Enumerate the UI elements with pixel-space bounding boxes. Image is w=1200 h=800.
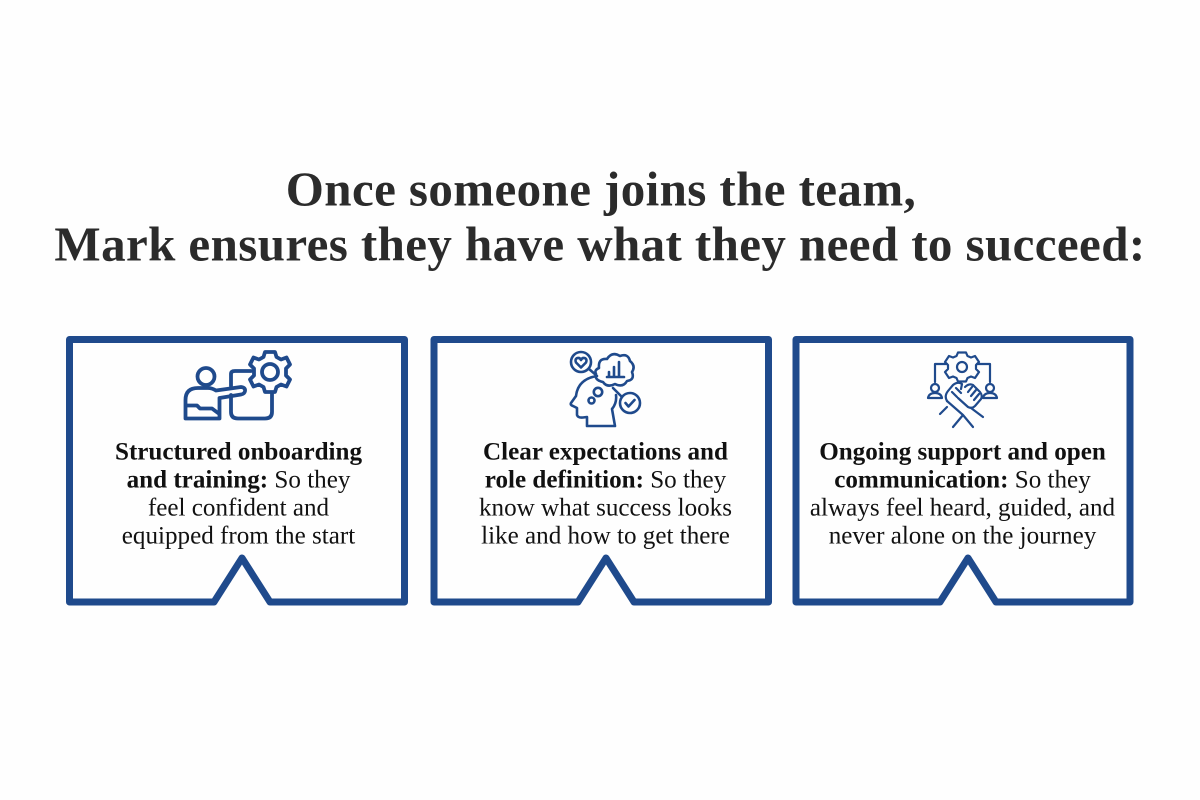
panel text: Structured onboarding (115, 438, 362, 466)
panel: clear expectations and role definition (434, 340, 768, 602)
panel: clear expectations and role definition: role definition: So they (485, 466, 727, 494)
panel: ongoing support and open communication: communication: So they (834, 466, 1091, 494)
panel: ongoing support and open communication (796, 340, 1130, 602)
panel: structured onboarding and training: equipped from the start (122, 522, 355, 550)
panel: structured onboarding and training (70, 340, 404, 602)
icon: head with thought cloud (571, 352, 640, 426)
panel: clear expectations and role definition: like and how to get there (481, 522, 730, 550)
icon: handshake with gear and people (928, 352, 997, 427)
icon: person presenting with gear (186, 352, 290, 418)
panel frame with notch (796, 340, 1130, 602)
title (54, 162, 1146, 272)
panel: ongoing support and open communication: never alone on the journey (829, 522, 1097, 550)
panel text: Clear expectations and (483, 438, 728, 466)
panel text: Ongoing support and open (819, 438, 1106, 466)
panel frame with notch (70, 340, 404, 602)
panel: ongoing support and open communication: always feel heard, guided, and (810, 494, 1116, 522)
title: Mark ensures they have what they need to succeed: (54, 216, 1146, 272)
title: Once someone joins the team, (286, 162, 916, 216)
panel: clear expectations and role definition: know what success looks (479, 494, 732, 522)
panel: structured onboarding and training: feel confident and (148, 494, 330, 522)
panel frame with notch (434, 340, 768, 602)
panel: structured onboarding and training: and training: So they (127, 466, 351, 494)
